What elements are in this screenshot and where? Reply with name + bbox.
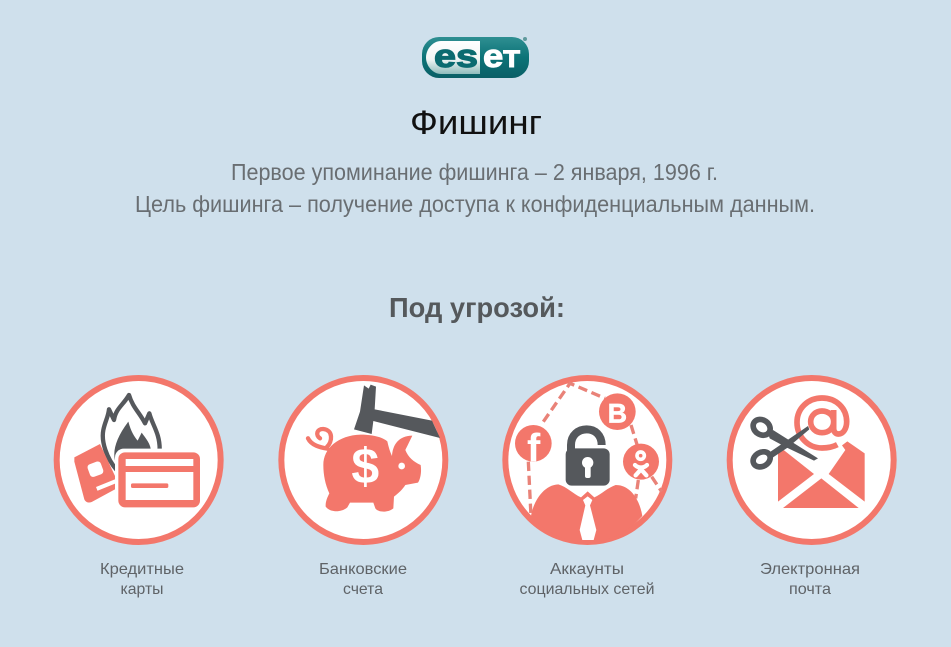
padlock bbox=[566, 429, 610, 486]
label: credit cards: Кредитные bbox=[100, 561, 184, 578]
label: bank accounts: Банковские bbox=[319, 561, 407, 578]
logo: ESET: eT bbox=[483, 38, 520, 74]
label: bank accounts bbox=[319, 561, 407, 598]
flame bbox=[103, 395, 160, 470]
title: Фишинг bbox=[410, 104, 542, 142]
logo: ESET: es bbox=[434, 38, 478, 74]
person bbox=[531, 484, 642, 542]
scissors bbox=[750, 416, 818, 470]
piggy bbox=[308, 429, 421, 512]
vkontakte badge: В bbox=[608, 398, 627, 428]
facebook badge: f bbox=[527, 427, 541, 471]
piggy: $ bbox=[351, 438, 379, 494]
label: email bbox=[760, 561, 860, 598]
icon: credit cards bbox=[57, 378, 221, 542]
label: bank accounts: счета bbox=[343, 581, 383, 598]
label: social accounts: социальных сетей bbox=[520, 581, 654, 598]
label: email: почта bbox=[789, 581, 831, 598]
subtitle text: Первое упоминание фишинга – 2 января, 1996 г. bbox=[231, 159, 718, 185]
heading: under threat: Под угрозой: bbox=[389, 292, 565, 323]
icon: piggy bank and hammer bbox=[281, 378, 445, 542]
subtitle text: Цель фишинга – получение доступа к конфиденциальным данным. bbox=[135, 191, 815, 217]
label: social accounts bbox=[520, 561, 654, 598]
label: social accounts: Аккаунты bbox=[550, 561, 624, 578]
label: email: Электронная bbox=[760, 561, 860, 578]
dashed links bbox=[528, 383, 662, 517]
icon: locked social accounts bbox=[505, 378, 669, 542]
odnoklassniki badge bbox=[623, 444, 659, 480]
label: credit cards: карты bbox=[120, 581, 164, 598]
at sign bbox=[797, 398, 847, 448]
logo: ESET bbox=[422, 37, 529, 78]
facebook badge bbox=[515, 425, 552, 471]
subtitle text bbox=[135, 159, 815, 217]
icon: envelope, at sign and scissors bbox=[730, 378, 894, 542]
envelope bbox=[778, 441, 865, 508]
hammer bbox=[354, 385, 440, 438]
label: credit cards bbox=[100, 561, 184, 598]
vkontakte badge bbox=[599, 393, 636, 430]
front card bbox=[115, 449, 204, 511]
back card bbox=[74, 444, 120, 503]
